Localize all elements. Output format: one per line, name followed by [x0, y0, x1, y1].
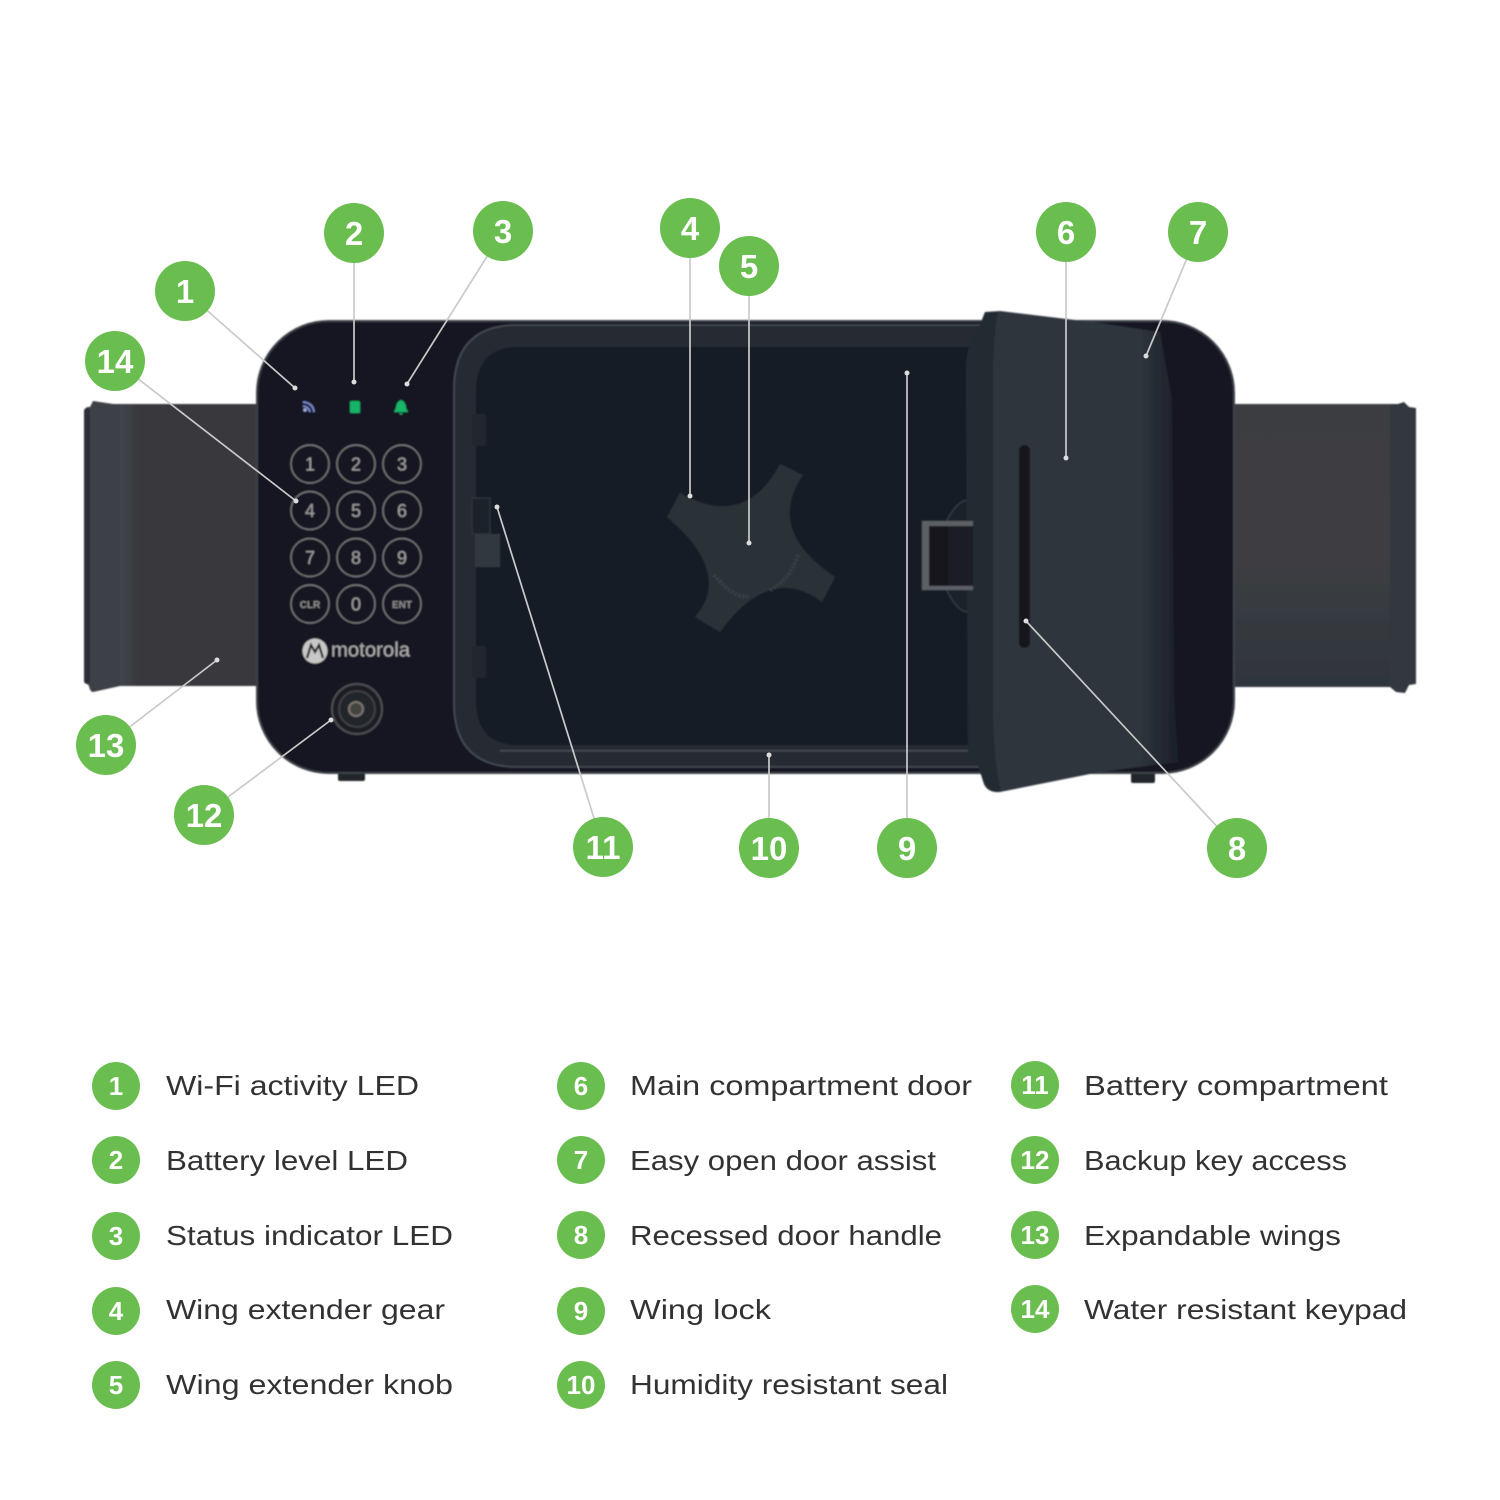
- legend item 4: 4: [109, 1296, 124, 1326]
- callout 8: [1024, 618, 1267, 878]
- keypad: 1: [305, 454, 315, 474]
- legend item 1: [92, 1062, 419, 1110]
- legend: [92, 1061, 1407, 1409]
- callout 14: 14: [97, 343, 134, 380]
- callout 6: [1036, 202, 1096, 460]
- callout 12: [174, 718, 334, 845]
- wing lock latch: [921, 521, 973, 590]
- feet: [338, 770, 1155, 783]
- keypad: 6: [397, 501, 407, 521]
- legend item 11: Battery compartment: [1084, 1070, 1388, 1101]
- legend item 3: 3: [109, 1221, 123, 1251]
- legend item 2: [92, 1136, 408, 1184]
- callout 5: 5: [740, 248, 758, 285]
- legend item 5: [92, 1361, 453, 1409]
- callout 2: [324, 203, 384, 384]
- battery compartment clips: [472, 414, 500, 678]
- keypad: CLR: [300, 600, 321, 611]
- motorola logo: motorola: [331, 640, 411, 662]
- callout 1: [155, 261, 298, 390]
- callout 11: [494, 504, 633, 877]
- leader lines and numbered callouts: [76, 198, 1267, 878]
- legend item 11: [1011, 1061, 1388, 1109]
- callout 14: [85, 331, 298, 504]
- compartment cavity: [476, 347, 1000, 745]
- legend item 1: 1: [109, 1071, 123, 1101]
- door hinge plate: [947, 500, 968, 612]
- legend item 14: Water resistant keypad: [1084, 1294, 1407, 1325]
- legend item 6: [557, 1062, 972, 1110]
- callout 8: 8: [1228, 830, 1246, 867]
- keypad: 3: [397, 454, 407, 474]
- legend item 12: 12: [1021, 1145, 1049, 1175]
- callout 4: [660, 198, 720, 498]
- legend item 3: Status indicator LED: [166, 1220, 453, 1251]
- keypad: ENT: [392, 600, 412, 611]
- callout 5: [719, 236, 779, 546]
- callout 12: 12: [186, 797, 222, 834]
- legend item 4: [92, 1287, 445, 1335]
- legend item 2: Battery level LED: [166, 1145, 408, 1176]
- keypad: [291, 445, 421, 623]
- callout 6: 6: [1057, 214, 1075, 251]
- safe body: [257, 321, 1234, 773]
- legend item 10: [557, 1361, 948, 1409]
- legend item 8: [557, 1211, 942, 1259]
- legend item 8: Recessed door handle: [630, 1220, 942, 1251]
- callout 11: 11: [586, 829, 620, 866]
- icon: battery LED: [350, 401, 360, 413]
- right expandable wing: [1228, 402, 1416, 693]
- legend item 8: 8: [574, 1220, 588, 1250]
- compartment seal: [454, 325, 1000, 767]
- callout 10: [739, 752, 799, 878]
- keypad: 5: [351, 501, 361, 521]
- LED icons: [303, 400, 408, 415]
- legend item 14: 14: [1021, 1294, 1050, 1324]
- legend item 13: Expandable wings: [1084, 1220, 1341, 1251]
- wing extender knob: [667, 464, 835, 632]
- callout 1: 1: [176, 273, 194, 310]
- keypad: 4: [305, 501, 315, 521]
- legend item 5: 5: [109, 1370, 123, 1400]
- backup key cylinder: [332, 684, 382, 734]
- legend item 13: 13: [1021, 1220, 1049, 1250]
- legend item 9: [557, 1287, 772, 1335]
- legend item 9: Wing lock: [630, 1294, 772, 1325]
- icon: bell LED: [394, 400, 408, 415]
- callout 3: 3: [494, 213, 512, 250]
- callout 9: 9: [898, 830, 916, 867]
- callout 13: [76, 658, 220, 775]
- legend item 14: [1011, 1285, 1407, 1333]
- callout 7: [1144, 202, 1228, 358]
- callout 2: 2: [345, 215, 363, 252]
- callout 4: 4: [681, 210, 700, 247]
- legend item 9: 9: [574, 1296, 588, 1326]
- legend item 10: Humidity resistant seal: [630, 1369, 948, 1400]
- callout 9: [877, 370, 937, 878]
- legend item 1: Wi-Fi activity LED: [166, 1070, 419, 1101]
- keypad: 8: [351, 548, 361, 568]
- legend item 3: [92, 1212, 453, 1260]
- keypad: 2: [351, 454, 361, 474]
- legend item 11: 11: [1021, 1070, 1049, 1100]
- keypad: 9: [397, 548, 407, 568]
- legend item 12: Backup key access: [1084, 1145, 1347, 1176]
- motorola logo: [302, 638, 411, 664]
- keypad: 0: [351, 594, 361, 614]
- callout 3: [404, 201, 533, 386]
- legend item 6: 6: [574, 1071, 588, 1101]
- legend item 6: Main compartment door: [630, 1070, 972, 1101]
- legend item 5: Wing extender knob: [166, 1369, 453, 1400]
- product: motorola safe: [84, 311, 1416, 792]
- legend item 7: 7: [574, 1145, 588, 1175]
- main compartment door: [966, 311, 1178, 792]
- callout 13: 13: [88, 727, 124, 764]
- legend item 2: 2: [109, 1145, 123, 1175]
- legend item 7: [557, 1136, 936, 1184]
- callout 7: 7: [1189, 214, 1207, 251]
- left expandable wing: [84, 401, 260, 692]
- icon: wifi LED: [303, 402, 314, 412]
- legend item 12: [1011, 1136, 1347, 1184]
- callout 10: 10: [751, 830, 787, 867]
- legend item 10: 10: [567, 1370, 595, 1400]
- recessed door handle: [1019, 445, 1030, 648]
- keypad: 7: [305, 548, 315, 568]
- legend item 13: [1011, 1211, 1341, 1259]
- legend item 7: Easy open door assist: [630, 1145, 936, 1176]
- legend item 4: Wing extender gear: [166, 1294, 445, 1325]
